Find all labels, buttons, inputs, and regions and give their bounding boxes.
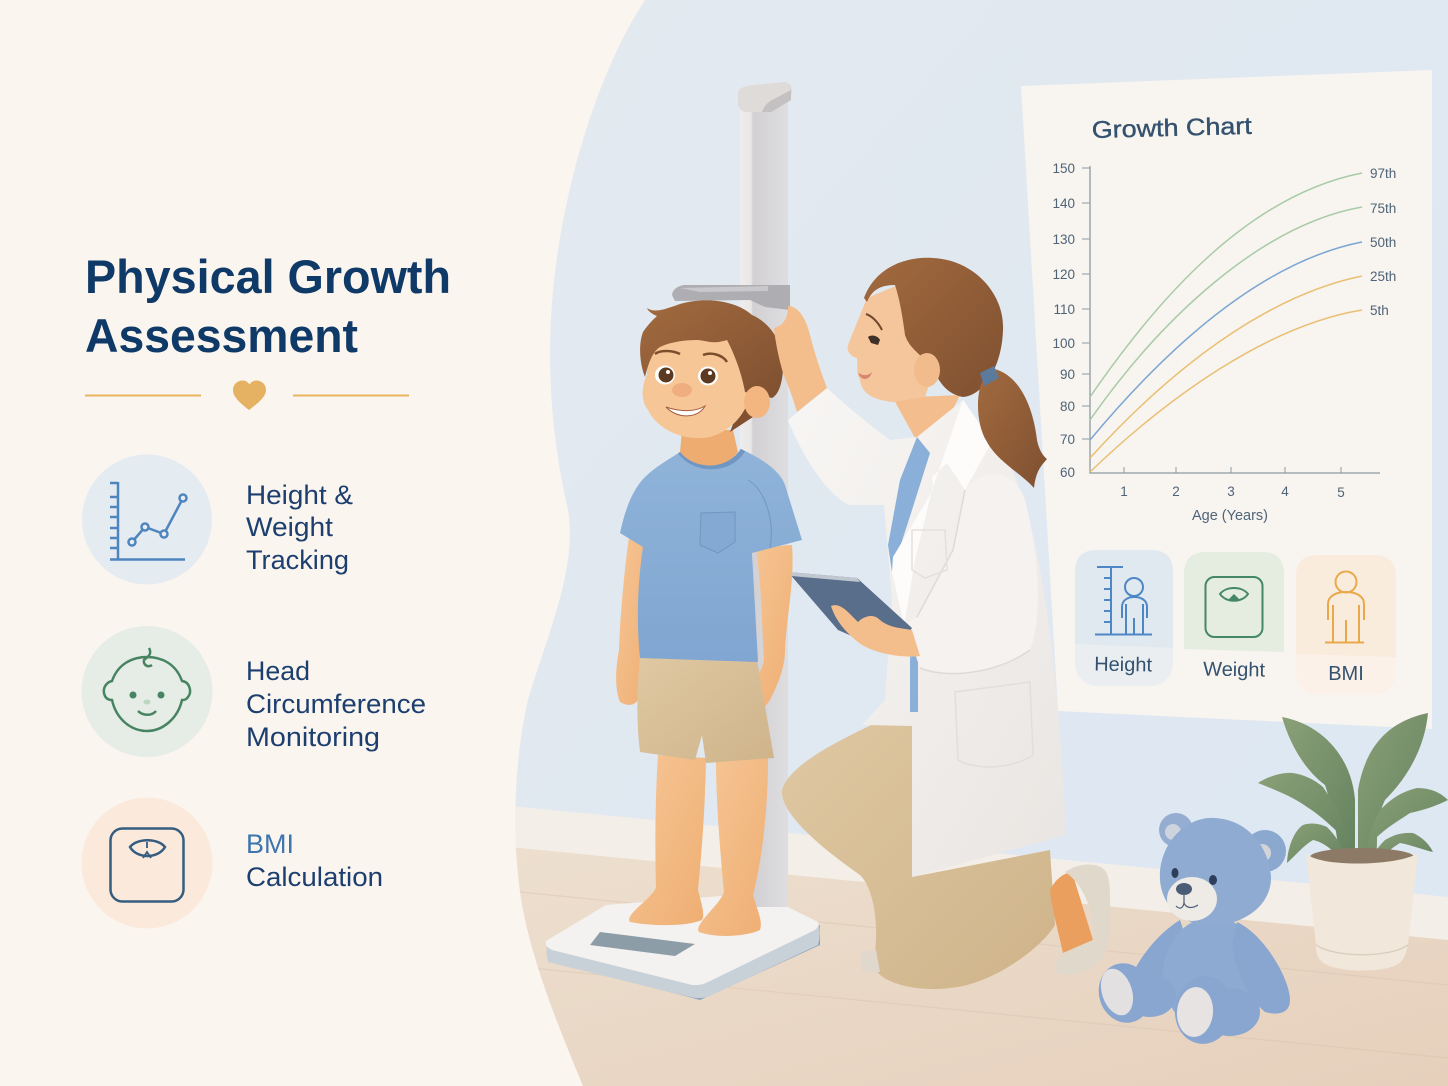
label: BMI calculation: Calculation [246, 862, 383, 892]
feature: head circumference monitoring [82, 626, 426, 757]
title: Assessment [85, 309, 358, 362]
nurse shoes and feet [861, 864, 1110, 975]
growth chart: 5th [1370, 303, 1389, 318]
title: Physical Growth [85, 250, 451, 303]
teddy head [1160, 818, 1271, 926]
wall poster: growth chart [1021, 70, 1432, 729]
growth chart: 120 [1052, 267, 1075, 282]
growth chart: 130 [1052, 232, 1075, 247]
growth chart: 2 [1172, 484, 1180, 499]
nurse tablet [788, 572, 912, 654]
growth chart: 60 [1060, 465, 1075, 480]
feature: height and weight tracking [82, 454, 353, 584]
growth chart: 100 [1052, 336, 1075, 351]
growth chart: 97th [1370, 166, 1396, 181]
feature: BMI calculation [82, 798, 383, 928]
label: height and weight tracking: Height & [246, 480, 353, 510]
label: height and weight tracking [246, 480, 353, 575]
growth chart: 90 [1060, 367, 1075, 382]
boy shorts [637, 655, 774, 763]
teddy limbs and body [1092, 917, 1290, 1048]
boy arms [616, 530, 793, 712]
growth chart: 140 [1052, 196, 1075, 211]
nurse raised forearm and hand [774, 306, 827, 412]
teddy ears [1159, 813, 1286, 872]
label: head circumference monitoring: Head [246, 656, 310, 686]
growth chart: 5 [1337, 485, 1345, 500]
plant leaves [1258, 713, 1448, 863]
growth chart: 70 [1060, 432, 1075, 447]
icon: line chart [82, 454, 212, 584]
boy [616, 300, 802, 936]
label: BMI calculation [246, 829, 383, 892]
label: head circumference monitoring: Circumference [246, 689, 426, 719]
growth chart: 110 [1053, 302, 1075, 317]
plant pot [1306, 848, 1418, 971]
growth chart [1052, 161, 1396, 524]
growth chart: 75th [1370, 201, 1396, 216]
label: head circumference monitoring: Monitoring [246, 722, 380, 752]
growth chart: 4 [1281, 484, 1289, 499]
growth chart: 25th [1370, 269, 1396, 284]
growth chart: 80 [1060, 399, 1075, 414]
teddy foot pad: left [1095, 965, 1139, 1019]
title divider with heart icon [85, 380, 409, 410]
teddy foot pad: right [1175, 986, 1215, 1038]
title [85, 250, 451, 362]
poster card: weight: Weight [1203, 658, 1266, 682]
nurse head [848, 258, 1047, 488]
growth chart: 1 [1120, 484, 1128, 499]
poster card: BMI: BMI [1328, 663, 1364, 685]
nurse [782, 258, 1110, 989]
label: height and weight tracking: Tracking [246, 545, 349, 575]
poster card: weight [1184, 552, 1284, 682]
nurse lab coat [788, 388, 1066, 877]
boy shirt [620, 450, 802, 662]
growth chart: 3 [1227, 484, 1235, 499]
poster card: height [1075, 550, 1173, 686]
nurse lower hand [831, 605, 920, 657]
potted plant [1258, 713, 1448, 971]
label: height and weight tracking: Weight [246, 512, 334, 542]
nurse neck [893, 395, 960, 452]
growth chart: 150 [1052, 161, 1075, 176]
poster card: height: Height [1094, 653, 1153, 677]
headpiece slider [672, 285, 790, 310]
growth chart: 50th [1370, 235, 1396, 250]
scale platform [546, 893, 820, 1000]
scene background: wall, baseboard and floor [500, 0, 1448, 1086]
boy head [640, 300, 783, 466]
nurse trousers [782, 705, 1055, 989]
label: head circumference monitoring [246, 656, 426, 752]
poster card: BMI [1296, 555, 1396, 695]
boy legs and feet [629, 755, 768, 936]
icon: weighing scale [82, 798, 212, 928]
teddy bear [1092, 813, 1290, 1048]
height rod [738, 82, 792, 907]
poster heading: Growth Chart [1091, 113, 1252, 144]
icon: baby face [82, 626, 212, 757]
growth chart: Age (Years) [1192, 508, 1268, 524]
stadiometer and scale [546, 82, 820, 1000]
label: BMI calculation: BMI [246, 829, 294, 859]
